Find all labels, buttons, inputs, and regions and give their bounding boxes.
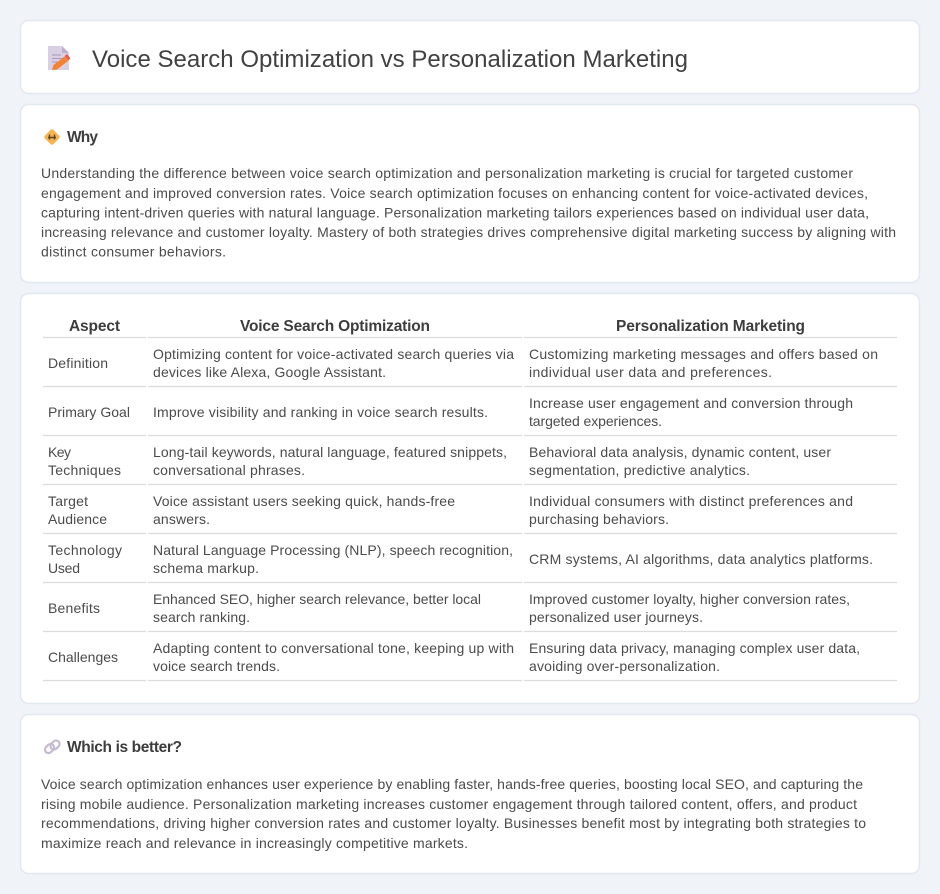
row: technology used: Used <box>48 560 80 576</box>
row: key techniques: conversational phrases. <box>153 462 305 478</box>
heading: which is better: Which is better? <box>67 739 182 756</box>
title: Voice Search Optimization vs Personalization Marketing <box>92 46 688 73</box>
icon: document with pencil <box>48 46 70 70</box>
icon: warning diamond <box>44 129 60 145</box>
row: target audience: Target <box>48 493 88 509</box>
row: challenges: Challenges <box>48 649 118 665</box>
row: key techniques: segmentation, predictive analytics. <box>529 462 750 478</box>
icon: chain link <box>43 739 61 755</box>
panel: which is better <box>20 714 920 874</box>
row: target audience: Voice assistant users seeking quick, hands-free <box>153 493 455 509</box>
row: challenges: voice search trends. <box>153 658 280 674</box>
row: key techniques: Long-tail keywords, natural language, featured snippets, <box>153 444 507 460</box>
row: definition: Optimizing content for voice-activated search queries via <box>153 346 514 362</box>
row: key techniques <box>48 444 831 478</box>
text block: why: engagement and improved conversion rates. Voice search optimization focuses on enhancing content for voice-activated devices, <box>41 185 868 201</box>
row: target audience: purchasing behaviors. <box>529 511 669 527</box>
row: benefits: Improved customer loyalty, higher conversion rates, <box>529 591 850 607</box>
row: key techniques: Techniques <box>48 462 121 478</box>
table header row <box>69 318 805 335</box>
text block: which is better <box>41 776 866 851</box>
heading: why: Why <box>67 129 98 146</box>
row: target audience <box>48 493 853 527</box>
text block: which is better: Voice search optimization enhances user experience by enabling faster, hands-free queries, boosting local SEO, and capturing the <box>41 776 863 792</box>
text block: why: capturing intent-driven queries with natural language. Personalization marketing tailors experiences based on individual user data, <box>41 204 869 220</box>
row: target audience: answers. <box>153 511 210 527</box>
row: challenges <box>48 640 860 674</box>
text block: why: Understanding the difference between voice search optimization and personalization marketing is crucial for targeted customer <box>41 165 853 181</box>
row: benefits: Benefits <box>48 600 100 616</box>
text block: which is better: rising mobile audience. Personalization marketing increases customer engagement through tailored content, offers, and product <box>41 796 857 812</box>
row: definition: Customizing marketing messages and offers based on <box>529 346 878 362</box>
row: benefits <box>48 591 850 625</box>
row: definition: devices like Alexa, Google Assistant. <box>153 364 386 380</box>
row: challenges: Adapting content to conversational tone, keeping up with <box>153 640 514 656</box>
row: technology used: Technology <box>48 542 122 558</box>
row: key techniques: Key <box>48 444 71 460</box>
row: primary goal: targeted experiences. <box>529 413 662 429</box>
row: primary goal <box>48 395 853 429</box>
row: challenges: Ensuring data privacy, managing complex user data, <box>529 640 860 656</box>
table header row: Personalization Marketing <box>616 318 805 335</box>
row: benefits: personalized user journeys. <box>529 609 703 625</box>
text block: why: increasing relevance and customer loyalty. Mastery of both strategies drives comprehensive digital marketing success by aligning with <box>41 224 896 240</box>
row: target audience: Audience <box>48 511 107 527</box>
row: benefits: search ranking. <box>153 609 250 625</box>
row: technology used <box>48 542 873 576</box>
text block: why <box>41 165 896 260</box>
row: challenges: avoiding over-personalization. <box>529 658 720 674</box>
row: target audience: Individual consumers with distinct preferences and <box>529 493 853 509</box>
row: technology used: schema markup. <box>153 560 259 576</box>
panel: comparison table <box>20 294 920 704</box>
panel: why <box>20 104 920 282</box>
row: definition <box>48 346 878 380</box>
text block: which is better: recommendations, driving higher conversion rates and customer loyalty. Businesses benefit most by integrating both strategies to <box>41 815 866 831</box>
text block: which is better: maximize reach and relevance in increasingly competitive markets. <box>41 835 468 851</box>
row: key techniques: Behavioral data analysis, dynamic content, user <box>529 444 831 460</box>
row: definition: Definition <box>48 355 108 371</box>
row: technology used: Natural Language Processing (NLP), speech recognition, <box>153 542 513 558</box>
row: definition: individual user data and preferences. <box>529 364 772 380</box>
row: primary goal: Increase user engagement and conversion through <box>529 395 853 411</box>
row: primary goal: Improve visibility and ranking in voice search results. <box>153 404 488 420</box>
table header row: Voice Search Optimization <box>240 318 430 335</box>
table header row: Aspect <box>69 318 120 335</box>
row: benefits: Enhanced SEO, higher search relevance, better local <box>153 591 481 607</box>
row: technology used: CRM systems, AI algorithms, data analytics platforms. <box>529 551 873 567</box>
text block: why: distinct consumer behaviors. <box>41 244 226 260</box>
header panel <box>20 20 920 94</box>
row: primary goal: Primary Goal <box>48 404 130 420</box>
